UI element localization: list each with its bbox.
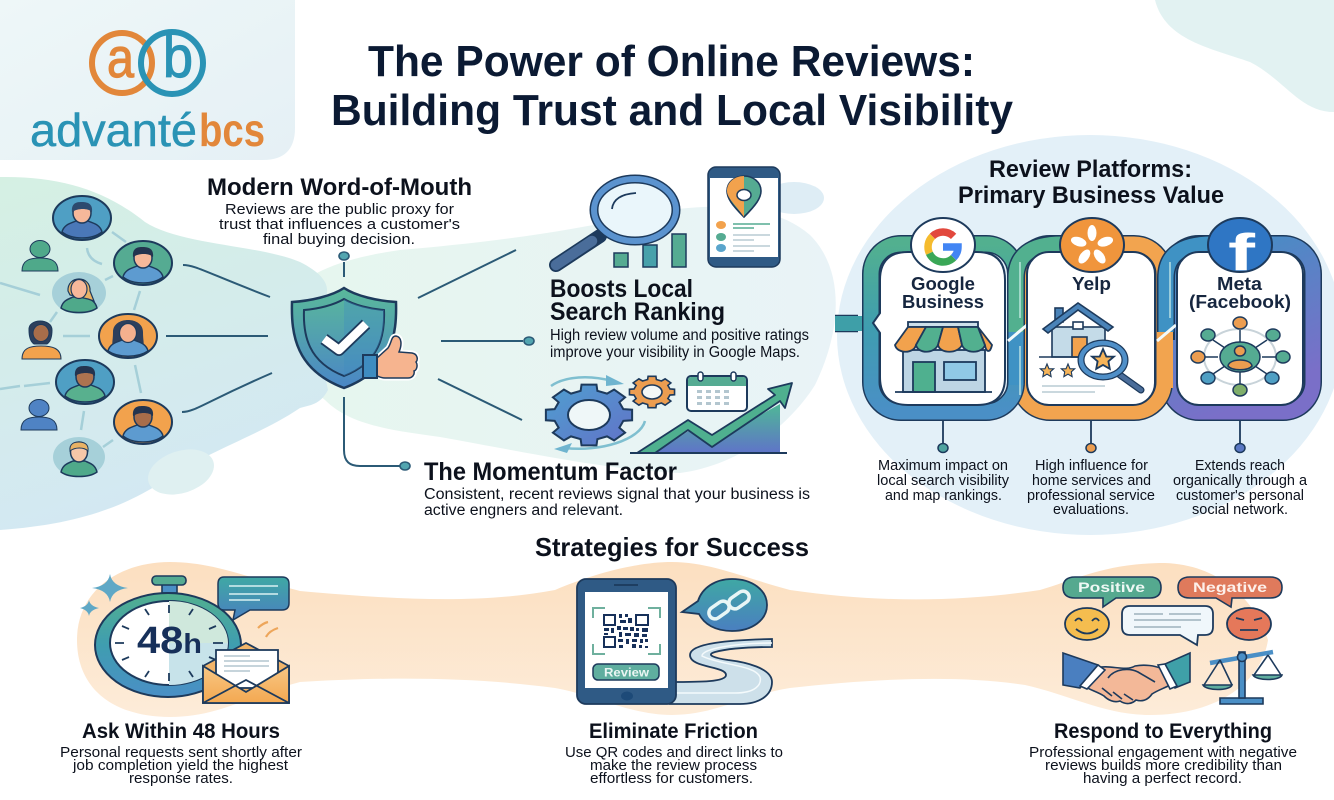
platform stems	[943, 421, 1240, 443]
speech bubble	[218, 577, 289, 620]
link bubble	[682, 579, 767, 631]
text: eliminate friction	[565, 720, 783, 787]
winding road	[670, 639, 772, 704]
avatar 3	[52, 272, 106, 314]
icon: gears and growth chart	[546, 372, 792, 453]
brace connector	[835, 316, 858, 332]
thumbs up	[360, 333, 420, 381]
text: respond to everything: having a perfect record.	[1083, 770, 1242, 787]
text: modern word of mouth	[207, 174, 472, 248]
avatar 6	[114, 400, 172, 444]
caption: yelp: evaluations.	[1053, 502, 1129, 518]
icon: google logo	[911, 218, 975, 272]
text: ask within 48 hours: Personal requests sent shortly after	[60, 744, 302, 761]
text: momentum factor: active engners and relevant.	[424, 502, 623, 519]
caption: google: and map rankings.	[885, 488, 1002, 504]
review button: Review	[604, 666, 650, 680]
text: eliminate friction: effortless for customers.	[590, 770, 753, 787]
icon: magnifier with bars	[556, 179, 686, 267]
text: respond to everything	[1029, 720, 1297, 787]
reply bubble	[1122, 606, 1213, 645]
connector lines from people to shield	[166, 265, 272, 412]
label	[902, 273, 984, 312]
caption: google: Maximum impact on	[878, 458, 1008, 474]
icon: yelp logo	[1060, 218, 1124, 272]
text: momentum factor	[424, 458, 810, 519]
logo: b	[163, 25, 193, 90]
large gear	[546, 385, 632, 445]
avatar 5	[56, 360, 114, 404]
icon: stopwatch with email	[80, 574, 289, 703]
text: respond to everything: Professional engagement with negative	[1029, 744, 1297, 761]
text: boosts local search ranking	[550, 275, 809, 361]
text: boosts local search ranking: improve your visibility in Google Maps.	[550, 344, 800, 361]
people network	[0, 196, 172, 477]
background: left network blob	[0, 177, 328, 530]
card: yelp	[1027, 218, 1155, 405]
small gear	[629, 376, 675, 408]
negative bubble: Negative	[1193, 579, 1267, 595]
avatar 1	[53, 196, 111, 240]
background: strategies band	[77, 562, 1268, 717]
text: boosts local search ranking: Search Ranking	[550, 298, 725, 326]
text: momentum factor: Consistent, recent reviews signal that your business is	[424, 486, 810, 503]
logo: a	[107, 26, 135, 89]
text: modern word of mouth: final buying decision.	[263, 231, 415, 248]
positive bubble	[1063, 577, 1161, 607]
silhouette green	[22, 240, 58, 271]
icon: phone with map pin	[708, 167, 780, 267]
tablet	[577, 579, 676, 704]
background: logo panel	[0, 0, 295, 160]
positive bubble: Positive	[1078, 579, 1145, 595]
meta band left segments	[1166, 244, 1212, 340]
title	[331, 37, 1014, 135]
label: (Facebook)	[1189, 291, 1291, 312]
growth area	[655, 404, 780, 453]
text: momentum factor: The Momentum Factor	[424, 458, 677, 486]
label: Business	[902, 291, 984, 312]
frown face	[1227, 608, 1271, 640]
text: boosts local search ranking: Boosts Local	[550, 275, 693, 303]
background: small blob bottom left	[142, 442, 220, 502]
caption: yelp	[1027, 458, 1155, 518]
title: Building Trust and Local Visibility	[331, 86, 1014, 135]
caption: google	[877, 458, 1010, 504]
caption: meta: Extends reach	[1195, 458, 1285, 474]
icon: shield with check and thumbs up	[292, 288, 420, 388]
calendar	[687, 372, 747, 411]
white slashes	[1008, 325, 1176, 341]
accent marks	[258, 622, 278, 637]
caption: yelp: home services and	[1032, 473, 1151, 489]
48h label: 48h	[137, 620, 202, 662]
sparkles	[80, 574, 128, 616]
caption: google: local search visibility	[877, 473, 1010, 489]
review button	[593, 664, 659, 680]
icon: storefront	[895, 322, 992, 392]
network connectors	[0, 232, 141, 447]
logo ring b	[141, 32, 203, 94]
smiley	[1065, 608, 1109, 640]
label	[1189, 273, 1291, 312]
qr brackets	[593, 608, 660, 654]
avatar 7	[53, 437, 105, 477]
text: ask within 48 hours: job completion yield the highest	[72, 757, 289, 774]
heading: strategies for success: Strategies for Success	[535, 532, 809, 562]
platform bands	[835, 244, 1313, 412]
caption: yelp: professional service	[1027, 488, 1155, 504]
qr code	[603, 614, 649, 648]
silhouette brown	[22, 321, 61, 359]
background: top right blob	[1155, 0, 1334, 112]
text: boosts local search ranking: High review volume and positive ratings	[550, 327, 809, 344]
icon: feedback, handshake and scales	[1063, 577, 1282, 704]
heading: review platforms: Primary Business Value	[958, 182, 1224, 209]
caption: yelp: High influence for	[1035, 458, 1148, 474]
avatar 2	[114, 241, 172, 285]
icon: facebook logo: f	[1228, 224, 1256, 282]
growth arrow	[637, 383, 792, 453]
caption: meta	[1173, 458, 1307, 518]
caption: meta: customer's personal	[1176, 488, 1304, 504]
text: modern word of mouth: Reviews are the public proxy for	[225, 201, 454, 218]
envelope	[203, 643, 289, 703]
caption: meta: social network.	[1192, 502, 1288, 518]
card: meta facebook	[1177, 218, 1303, 405]
caption: meta: organically through a	[1173, 473, 1307, 489]
background: platforms ellipse	[837, 135, 1334, 535]
logo wordmark	[30, 104, 265, 156]
text: respond to everything: reviews builds more credibility than	[1045, 757, 1282, 774]
icon: house with magnifier and stars	[1039, 303, 1141, 392]
silhouette blue	[21, 400, 57, 430]
logo wordmark: advanté	[30, 104, 197, 156]
icon: tablet with qr code and road	[577, 579, 772, 704]
text: ask within 48 hours	[60, 720, 302, 787]
scales	[1203, 652, 1282, 704]
connector dots	[339, 252, 534, 470]
label: Yelp	[1072, 273, 1111, 294]
background: small blob near phone	[764, 182, 824, 214]
icon: facebook logo	[1208, 218, 1272, 282]
stopwatch body	[95, 593, 241, 697]
handshake	[1063, 653, 1190, 704]
text: eliminate friction: Use QR codes and direct links to	[565, 744, 783, 761]
text: eliminate friction: make the review process	[590, 757, 757, 774]
background: centre blob	[280, 207, 836, 473]
card: google business	[873, 218, 1005, 405]
icon: social network	[1191, 317, 1290, 396]
text: respond to everything: Respond to Everything	[1054, 720, 1272, 743]
yelp band left segments	[1016, 244, 1062, 340]
connector lines from shield to benefits	[344, 250, 523, 466]
label: Google	[911, 273, 975, 294]
stopwatch crown	[152, 576, 186, 593]
text: ask within 48 hours: response rates.	[129, 770, 233, 787]
title: The Power of Online Reviews:	[368, 37, 975, 86]
logo	[30, 25, 265, 156]
avatar 4	[99, 314, 157, 358]
negative bubble	[1178, 577, 1282, 607]
heading: review platforms: Review Platforms:	[989, 156, 1192, 183]
check mark	[324, 324, 366, 350]
label: Meta	[1217, 273, 1263, 294]
cycle arrows	[551, 377, 645, 449]
text: modern word of mouth: trust that influences a customer's	[219, 216, 460, 233]
heading: review platforms	[958, 156, 1224, 209]
text: ask within 48 hours: Ask Within 48 Hours	[82, 720, 280, 743]
platform stem dots	[938, 444, 1245, 452]
text: modern word of mouth: Modern Word-of-Mouth	[207, 174, 472, 201]
logo wordmark: bcs	[199, 104, 265, 156]
text: eliminate friction: Eliminate Friction	[589, 720, 758, 743]
bars	[614, 234, 686, 267]
logo ring a	[92, 33, 152, 93]
